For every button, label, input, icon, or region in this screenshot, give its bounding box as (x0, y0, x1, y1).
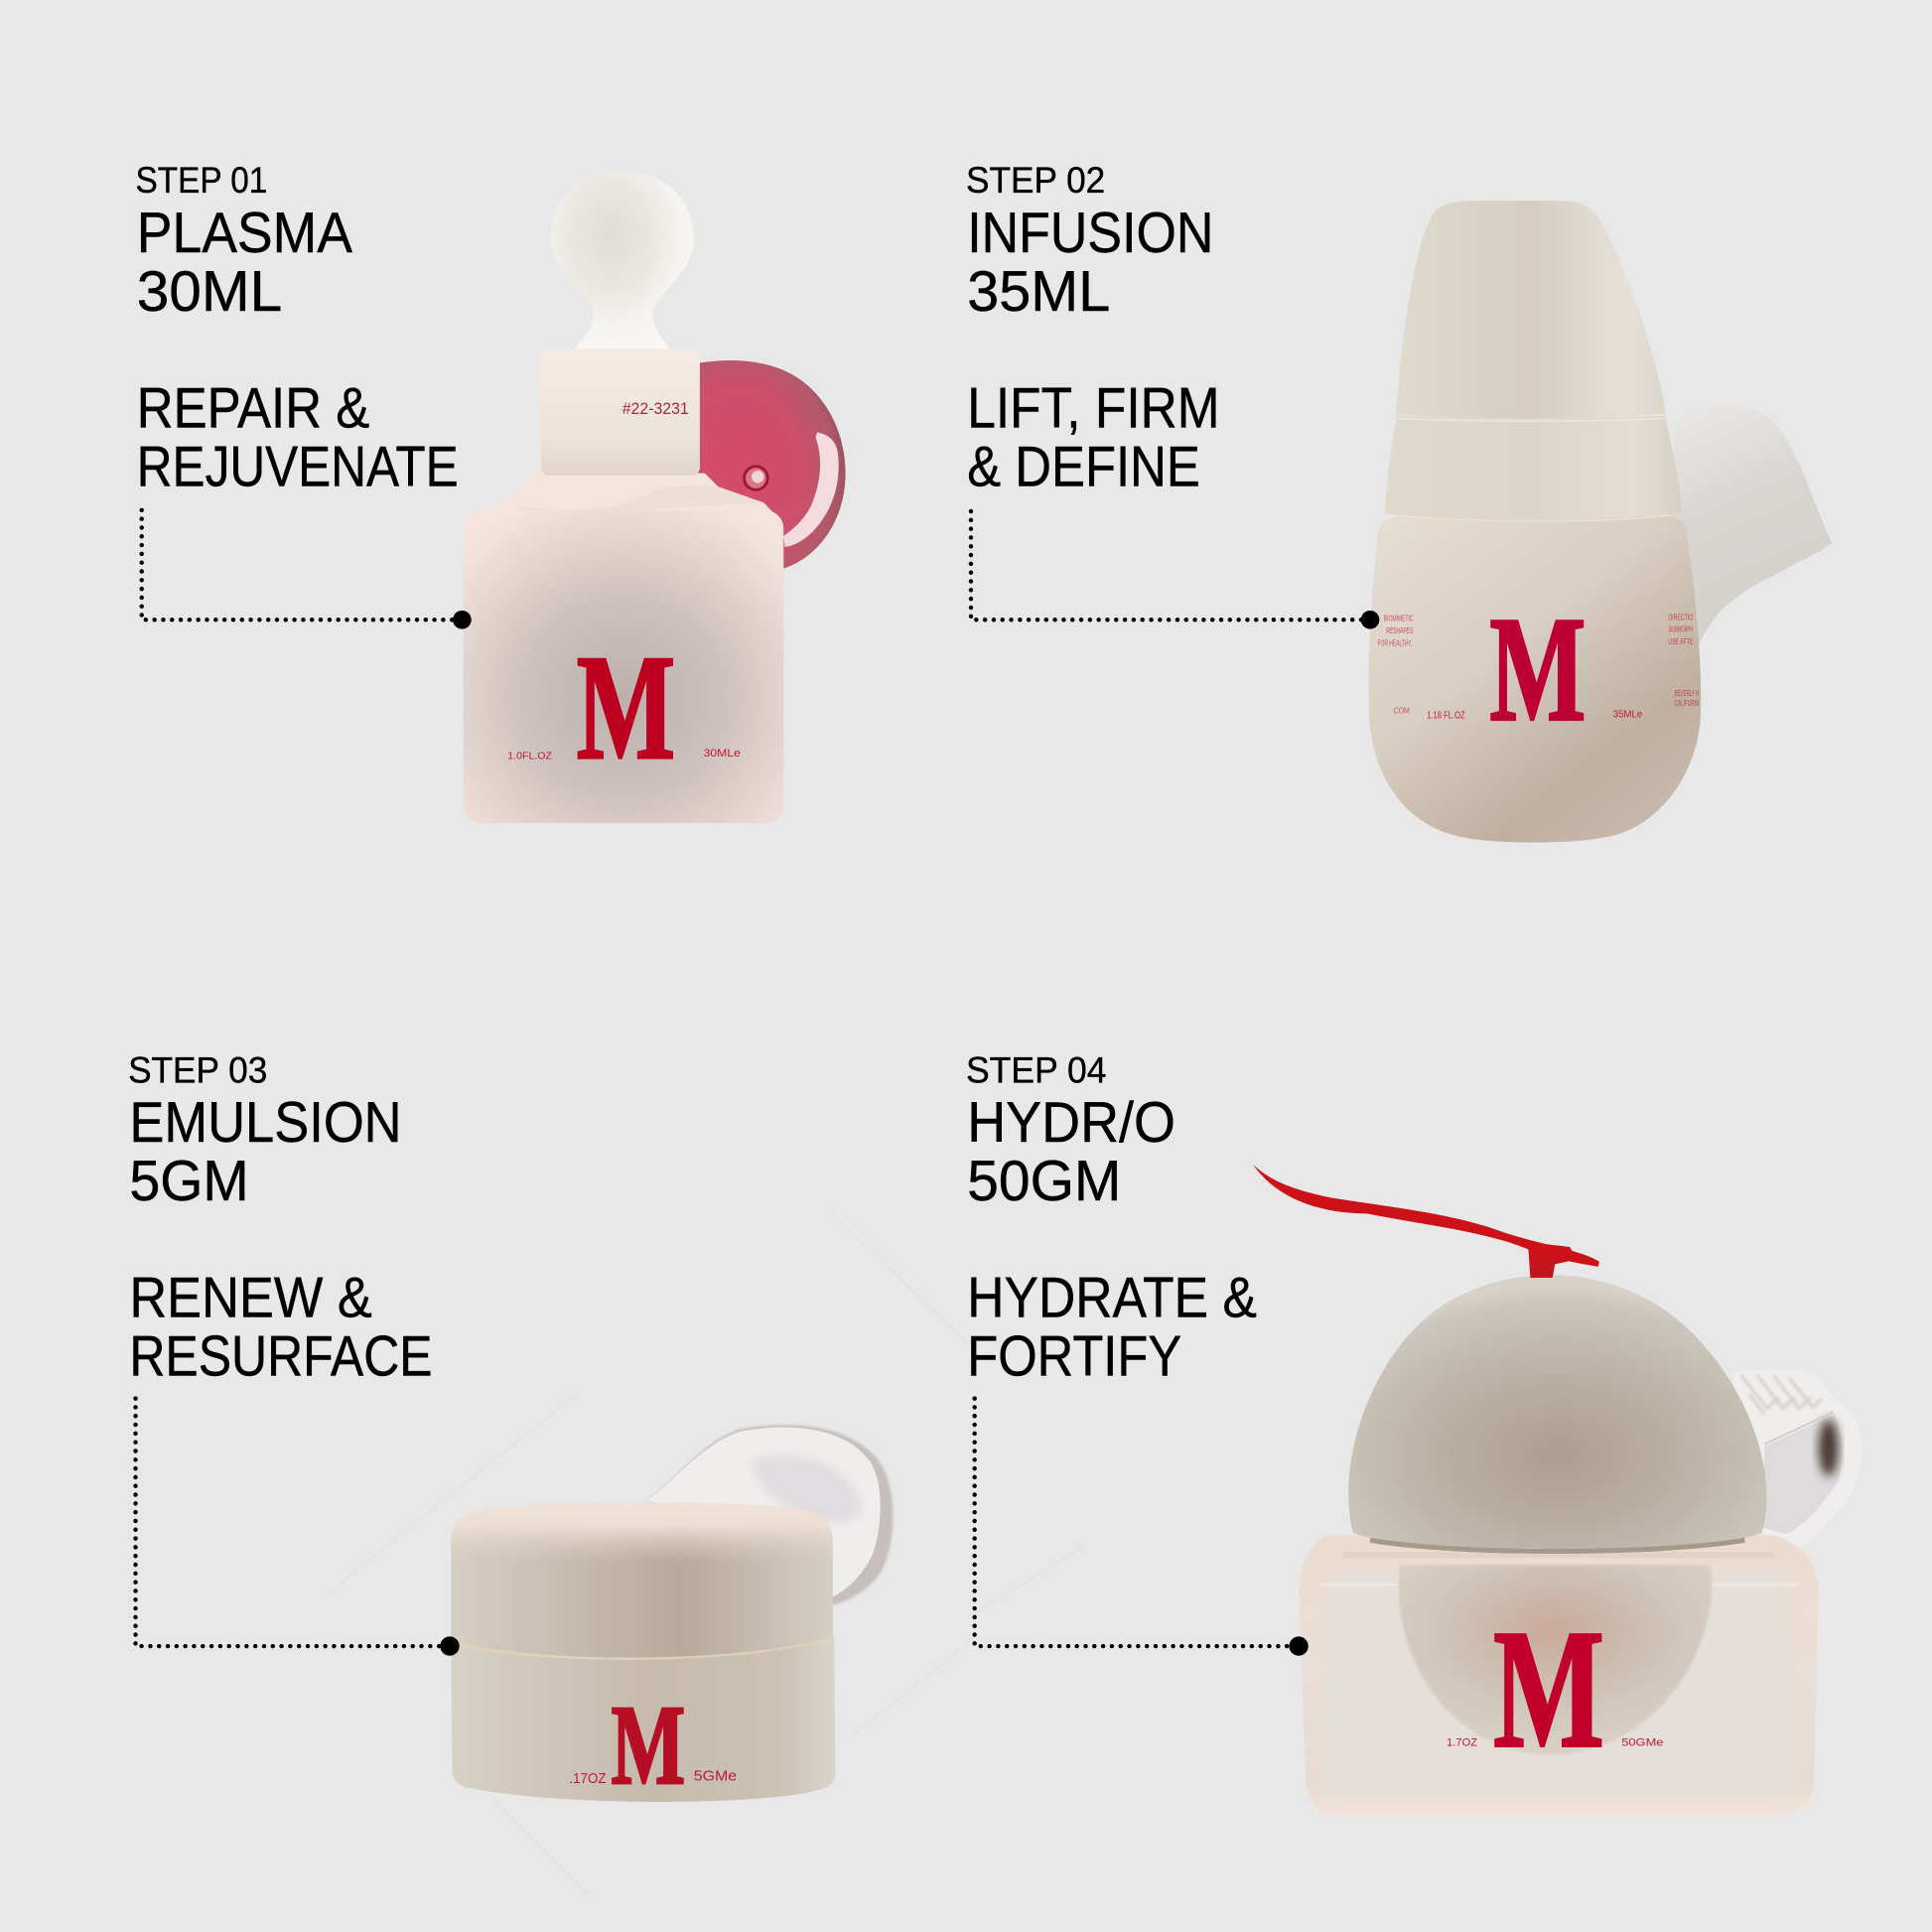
product: serum bottle (464, 172, 846, 823)
batch code: #22-3231 (622, 399, 689, 418)
volume labels (507, 748, 741, 761)
volume labels: 1.7OZ (1447, 1737, 1477, 1749)
connector line and dot (975, 1399, 1309, 1656)
heading: step 01 text: REPAIR & (137, 377, 369, 441)
volume labels: 30MLe (704, 748, 741, 759)
body (1368, 516, 1701, 843)
panel: step 01 plasma (136, 159, 846, 823)
printed body labels: USE AFTE (1668, 637, 1694, 646)
heading: step 03 text: STEP 03 (128, 1048, 267, 1090)
collar (1385, 419, 1682, 520)
panel: step 04 hydr/o (966, 1048, 1863, 1815)
connector line and dot (142, 510, 472, 629)
printed body labels (1378, 613, 1700, 722)
heading: step 04 text (966, 1048, 1257, 1389)
heading: step 01 text: REJUVENATE (137, 436, 459, 499)
glass base (1299, 1535, 1819, 1815)
dome (1348, 1275, 1766, 1549)
heading: step 04 text: HYDR/O (967, 1091, 1175, 1155)
heading: step 04 text: HYDRATE & (967, 1267, 1257, 1330)
heading: step 02 text (966, 159, 1220, 499)
bottle shoulder and body (464, 471, 783, 823)
printed body labels: BEVERLY H (1675, 689, 1700, 698)
printed body labels: DIRECTIO (1668, 613, 1693, 621)
panel: step 03 emulsion (128, 1048, 894, 1808)
heading: step 01 text (136, 159, 459, 499)
connector line and dot (971, 511, 1379, 629)
heading: step 04 text: FORTIFY (967, 1325, 1181, 1389)
volume labels: 5GMe (694, 1768, 737, 1784)
heading: step 02 text: 35ML (967, 260, 1110, 324)
top cap (1396, 201, 1666, 419)
dome seat shadow (1370, 1540, 1744, 1552)
connector line and dot (136, 1399, 460, 1656)
inner ball seen through glass (1399, 1565, 1712, 1754)
red spatula (1253, 1165, 1599, 1278)
printed body labels: RESHAPES (1386, 626, 1414, 635)
pink gel swatch (690, 360, 846, 571)
heading: step 02 text: INFUSION (967, 202, 1213, 265)
dropper collar (541, 348, 700, 476)
volume labels (1447, 1737, 1663, 1749)
heading: step 04 text: STEP 04 (966, 1048, 1106, 1090)
jar lid (451, 1502, 833, 1659)
printed body labels: CALIFORNI (1675, 699, 1699, 708)
printed body labels: SKINMORPH (1668, 625, 1693, 634)
printed body labels: FOR HEALTHY, (1378, 638, 1412, 647)
dropper ball (551, 172, 694, 352)
cream swatch (647, 1425, 894, 1605)
heading: step 03 text: EMULSION (129, 1091, 402, 1155)
heading: step 03 text: RESURFACE (129, 1325, 433, 1389)
heading: step 03 text (128, 1048, 433, 1389)
seam (451, 1637, 834, 1659)
heading: step 01 text: 30ML (137, 260, 282, 324)
heading: step 03 text: RENEW & (129, 1267, 372, 1330)
jar base (451, 1639, 835, 1802)
logo M: M (1493, 1595, 1604, 1784)
heading: step 03 text: 5GM (129, 1150, 249, 1213)
volume labels (569, 1768, 737, 1787)
printed body labels: COM (1394, 706, 1410, 716)
logo M: M (577, 623, 675, 790)
heading: step 01 text: PLASMA (137, 202, 352, 265)
heading: step 04 text: 50GM (967, 1150, 1121, 1213)
heading: step 01 text: STEP 01 (136, 159, 267, 201)
comb applicator (1731, 1370, 1863, 1549)
white cream smear (1663, 405, 1832, 653)
panel: step 02 infusion (966, 159, 1832, 843)
seams (1385, 416, 1682, 520)
printed body labels: 35MLe (1613, 708, 1642, 720)
heading: step 02 text: LIFT, FIRM (967, 377, 1220, 441)
printed body labels: 1.18 FL.OZ (1427, 711, 1465, 722)
product: hydr/o jar (1253, 1165, 1863, 1815)
printed body labels: BIOMIMETIC (1384, 614, 1414, 622)
volume labels: .17OZ (569, 1771, 607, 1787)
logo M: M (1489, 586, 1586, 753)
heading: step 02 text: STEP 02 (966, 159, 1105, 201)
logo M: M (612, 1682, 685, 1808)
product: emulsion jar (451, 1425, 894, 1808)
product: infusion bottle (1368, 201, 1832, 843)
volume labels: 50GMe (1621, 1737, 1663, 1749)
volume labels: 1.0FL.OZ (507, 750, 553, 761)
heading: step 02 text: & DEFINE (967, 436, 1200, 499)
